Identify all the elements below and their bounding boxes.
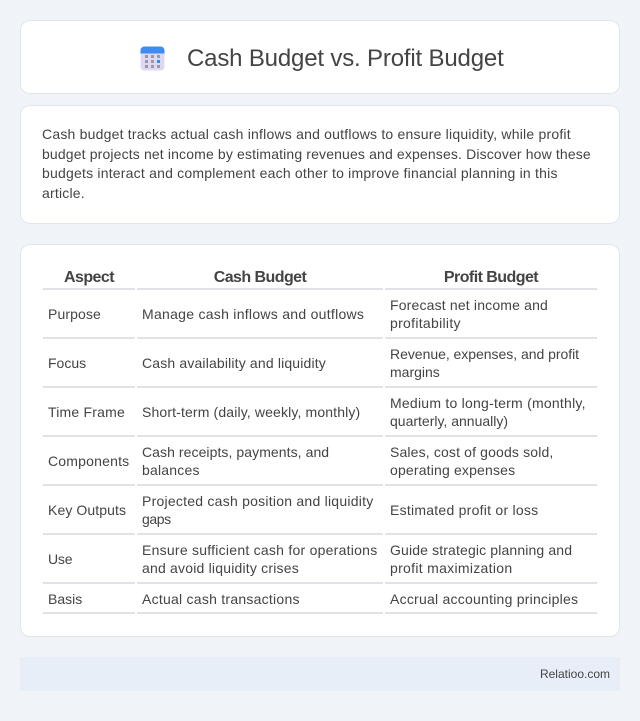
icon: calendar: [140, 46, 164, 70]
row: time frame: quarterly, annually): [390, 413, 508, 429]
intro text: [42, 126, 591, 200]
row: focus: margins: [390, 364, 440, 380]
row: purpose: Purpose: [48, 306, 101, 322]
row: basis: [48, 591, 578, 607]
row: use: [48, 542, 572, 576]
header panel: [20, 20, 620, 94]
footer bar: [20, 657, 620, 691]
intro text: budgets interact and complement each other to improve financial planning in this: [42, 165, 558, 181]
table header: [64, 269, 538, 286]
row: purpose: Manage cash inflows and outflows: [142, 306, 364, 322]
title: Cash Budget vs. Profit Budget: [187, 45, 504, 72]
row: time frame: Short-term (daily, weekly, monthly): [142, 404, 360, 420]
row: time frame: Medium to long-term (monthly,: [390, 395, 586, 411]
row: focus: Revenue, expenses, and profit: [390, 346, 579, 362]
row: components: Components: [48, 453, 129, 469]
row: basis: Accrual accounting principles: [390, 591, 578, 607]
row: key outputs: Key Outputs: [48, 502, 126, 518]
row: components: Cash receipts, payments, and: [142, 444, 329, 460]
row: time frame: Time Frame: [48, 404, 125, 420]
column heading: cash budget: Cash Budget: [214, 269, 306, 286]
row: purpose: [48, 297, 548, 331]
footer credit: Relatioo.com: [540, 667, 610, 681]
row: focus: Cash availability and liquidity: [142, 355, 326, 371]
row: focus: [48, 346, 579, 380]
row: use: Use: [48, 551, 72, 567]
row: key outputs: [48, 493, 538, 527]
row: basis: Basis: [48, 591, 82, 607]
row: components: Sales, cost of goods sold,: [390, 444, 553, 460]
intro text: budget projects net income by estimating revenues and expenses. Discover how these: [42, 146, 591, 162]
row: components: operating expenses: [390, 462, 515, 478]
row: purpose: Forecast net income and: [390, 297, 548, 313]
row: key outputs: Estimated profit or loss: [390, 502, 538, 518]
row: key outputs: Projected cash position and liquidity: [142, 493, 373, 509]
row: use: Guide strategic planning and: [390, 542, 572, 558]
row: basis: Actual cash transactions: [142, 591, 300, 607]
intro text: article.: [42, 184, 85, 200]
row: components: [48, 444, 553, 478]
row: use: and avoid liquidity crises: [142, 560, 299, 576]
row: use: profit maximization: [390, 560, 512, 576]
row: focus: Focus: [48, 355, 86, 371]
intro panel: [20, 105, 620, 224]
column heading: aspect: Aspect: [64, 269, 114, 286]
row: use: Ensure sufficient cash for operations: [142, 542, 377, 558]
column heading: profit budget: Profit Budget: [444, 269, 538, 286]
row: purpose: profitability: [390, 315, 461, 331]
intro text: Cash budget tracks actual cash inflows and outflows to ensure liquidity, while profit: [42, 126, 571, 142]
comparison table panel: [20, 244, 620, 637]
row: components: balances: [142, 462, 200, 478]
row: time frame: [48, 395, 586, 429]
row: key outputs: gaps: [142, 511, 171, 527]
